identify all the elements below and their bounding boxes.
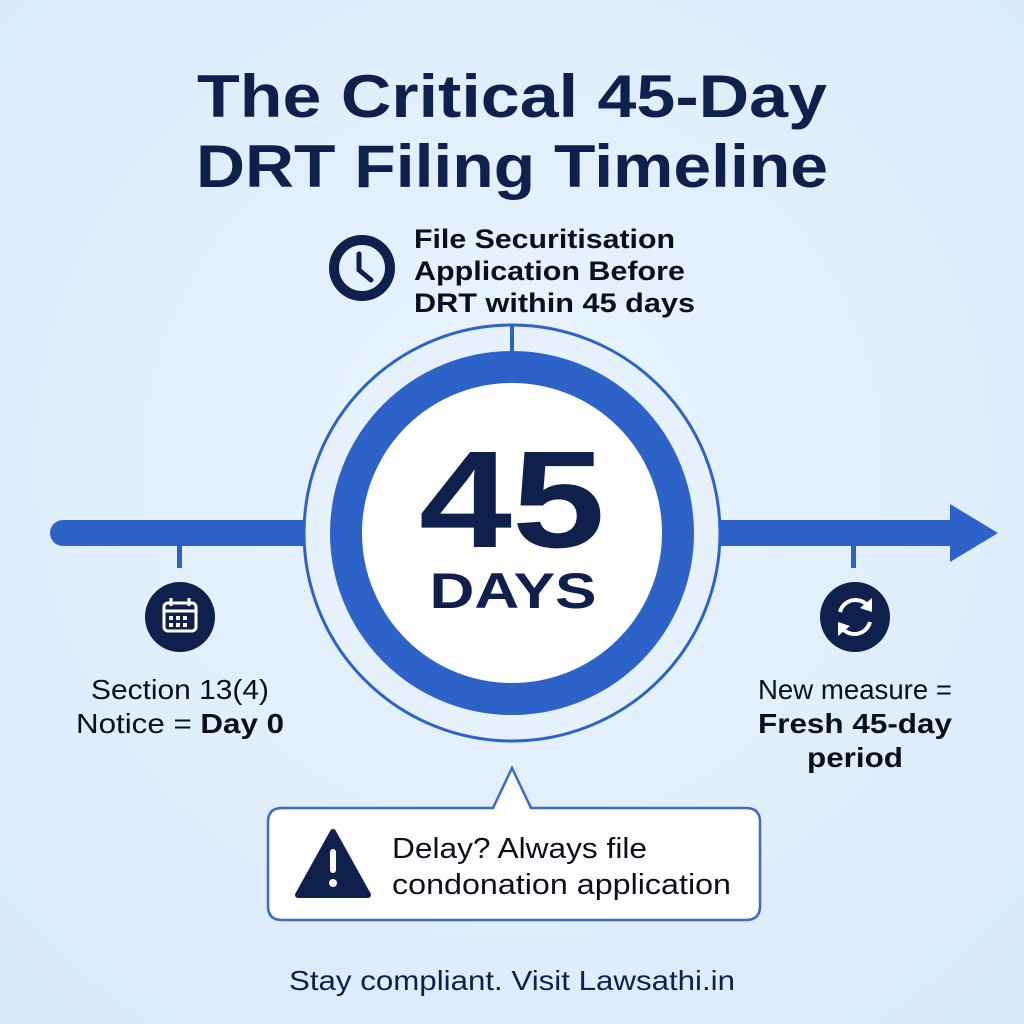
right milestone text: Fresh 45-day: [758, 708, 952, 739]
45 days dial: DAYS: [430, 563, 596, 619]
top milestone text: Application Before: [414, 256, 685, 286]
top milestone text: File Securitisation: [414, 224, 675, 254]
icon: refresh: [820, 582, 890, 652]
callout: condonation: [268, 768, 760, 920]
callout: condonation: condonation application: [392, 869, 731, 901]
icon: clock: [334, 240, 390, 296]
right milestone text: New measure =: [758, 674, 952, 705]
left milestone text: [76, 674, 284, 739]
right milestone text: [758, 674, 952, 773]
title: DRT Filing Timeline: [196, 133, 828, 200]
footer: Stay compliant. Visit Lawsathi.in: [289, 965, 735, 996]
title: The Critical 45-Day: [197, 63, 828, 130]
45 days dial: 45: [419, 423, 605, 577]
45 days dial: [304, 325, 720, 741]
timeline arrow: [50, 504, 998, 568]
icon: calendar: [145, 582, 215, 652]
title: [196, 63, 828, 200]
left milestone text: Notice = Day 0: [76, 708, 284, 739]
right milestone text: period: [807, 742, 903, 773]
left milestone text: Section 13(4): [91, 674, 269, 705]
top milestone text: [414, 224, 695, 318]
callout: condonation: Delay? Always file: [392, 833, 647, 865]
top milestone text: DRT within 45 days: [414, 288, 695, 318]
